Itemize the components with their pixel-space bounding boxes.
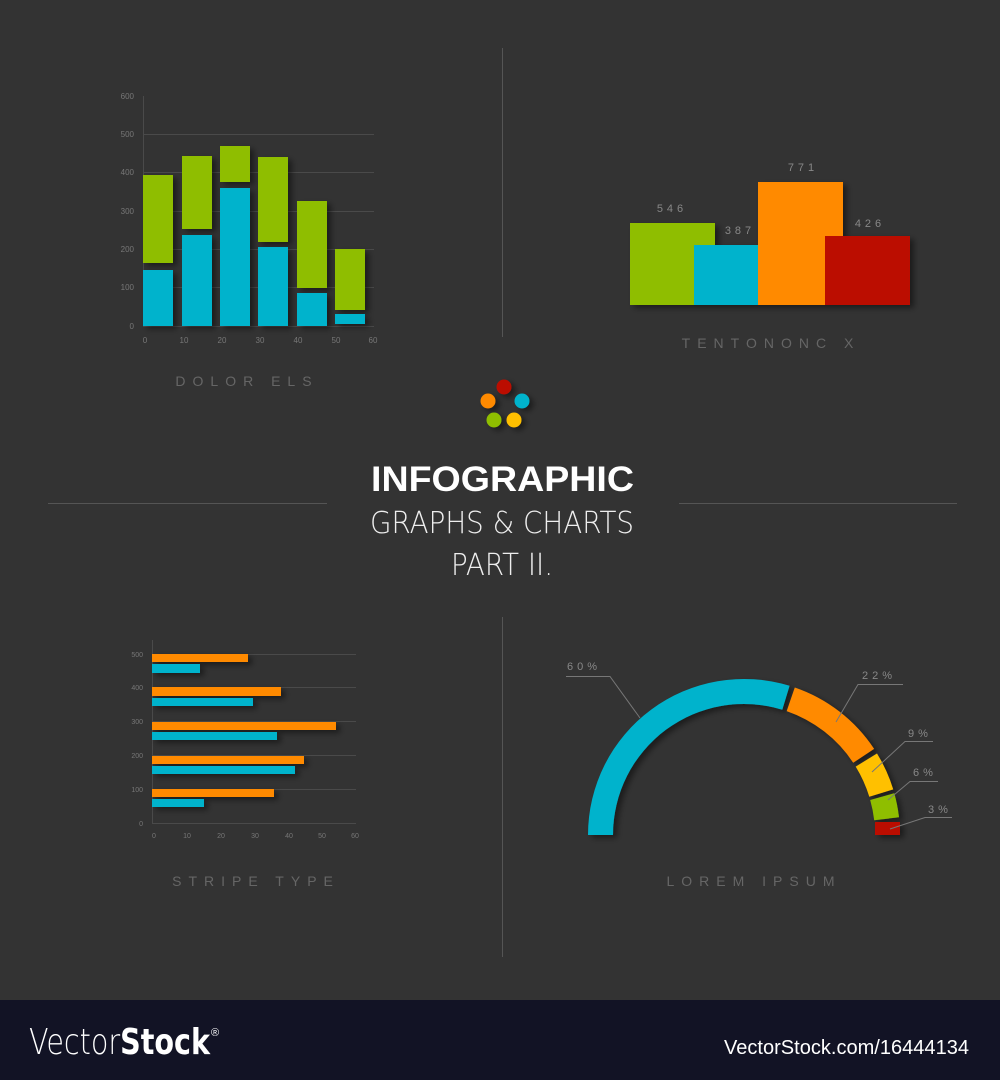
footer bar: VectorStock — [29, 1022, 211, 1063]
panel: horizontal bar chart (Stripe Type): 0 — [139, 821, 143, 828]
panel: stacked bar chart (Dolor Els) — [121, 92, 378, 389]
title: GRAPHS & CHARTS — [370, 506, 634, 541]
panel: stacked bar chart (Dolor Els): 40 — [294, 336, 303, 345]
panel: horizontal bar chart (Stripe Type): 500 — [131, 652, 143, 659]
logo: five dots — [480, 380, 530, 428]
panel: stacked bar chart (Dolor Els): 10 — [180, 336, 189, 345]
panel: stacked bar chart (Dolor Els): 400 — [121, 168, 135, 177]
panel: stacked bar chart (Dolor Els): 500 — [121, 130, 135, 139]
label: Stripe Type: STRIPE TYPE — [172, 873, 340, 889]
title: INFOGRAPHIC — [371, 460, 634, 499]
panel: half donut chart (Lorem Ipsum): 9% — [908, 728, 932, 740]
panel: half donut chart (Lorem Ipsum) — [566, 661, 952, 889]
panel: horizontal bar chart (Stripe Type): 50 — [318, 833, 326, 840]
panel: half donut chart (Lorem Ipsum): 22% — [862, 670, 896, 682]
panel: horizontal bar chart (Stripe Type): 40 — [285, 833, 293, 840]
panel: stacked bar chart (Dolor Els): 0 — [143, 336, 148, 345]
footer bar: ® — [211, 1027, 219, 1039]
panel: stacked bar chart (Dolor Els): 60 — [369, 336, 378, 345]
panel: horizontal bar chart (Stripe Type): 400 — [131, 685, 143, 692]
title: PART II. — [451, 548, 553, 583]
panel: stacked bar chart (Dolor Els): 30 — [256, 336, 265, 345]
panel: stacked bar chart (Dolor Els): 300 — [121, 207, 135, 216]
label: Dolor Els: DOLOR ELS — [175, 373, 319, 389]
panel: overlapping bars (Tentononc X) — [630, 162, 910, 351]
panel: horizontal bar chart (Stripe Type): 20 — [217, 833, 225, 840]
label: Lorem Ipsum: LOREM IPSUM — [666, 873, 842, 889]
panel: overlapping bars (Tentononc X): 426 — [855, 218, 885, 230]
panel: half donut chart (Lorem Ipsum): 60% — [567, 661, 601, 673]
label: Tentononc X: TENTONONC X — [682, 335, 860, 351]
panel: overlapping bars (Tentononc X): 546 — [657, 203, 687, 215]
panel: horizontal bar chart (Stripe Type): 0 — [152, 833, 156, 840]
panel: overlapping bars (Tentononc X): 771 — [788, 162, 818, 174]
panel: stacked bar chart (Dolor Els): 0 — [130, 322, 135, 331]
panel: horizontal bar chart (Stripe Type): 60 — [351, 833, 359, 840]
footer bar: VectorStock.com/16444134 — [724, 1037, 969, 1059]
panel: stacked bar chart (Dolor Els): 600 — [121, 92, 135, 101]
panel: overlapping bars (Tentononc X): 387 — [725, 225, 755, 237]
panel: horizontal bar chart (Stripe Type): 200 — [131, 753, 143, 760]
panel: horizontal bar chart (Stripe Type): 300 — [131, 719, 143, 726]
panel: stacked bar chart (Dolor Els): 100 — [121, 283, 135, 292]
panel: horizontal bar chart (Stripe Type): 10 — [183, 833, 191, 840]
panel: stacked bar chart (Dolor Els): 20 — [218, 336, 227, 345]
panel: stacked bar chart (Dolor Els): 50 — [332, 336, 341, 345]
panel: stacked bar chart (Dolor Els): 200 — [121, 245, 135, 254]
panel: half donut chart (Lorem Ipsum): 6% — [913, 767, 937, 779]
panel: horizontal bar chart (Stripe Type): 100 — [131, 787, 143, 794]
footer bar — [0, 1000, 1000, 1080]
panel: horizontal bar chart (Stripe Type): 30 — [251, 833, 259, 840]
panel: half donut chart (Lorem Ipsum): 3% — [928, 804, 952, 816]
panel: horizontal bar chart (Stripe Type) — [131, 640, 359, 889]
title — [370, 460, 634, 583]
